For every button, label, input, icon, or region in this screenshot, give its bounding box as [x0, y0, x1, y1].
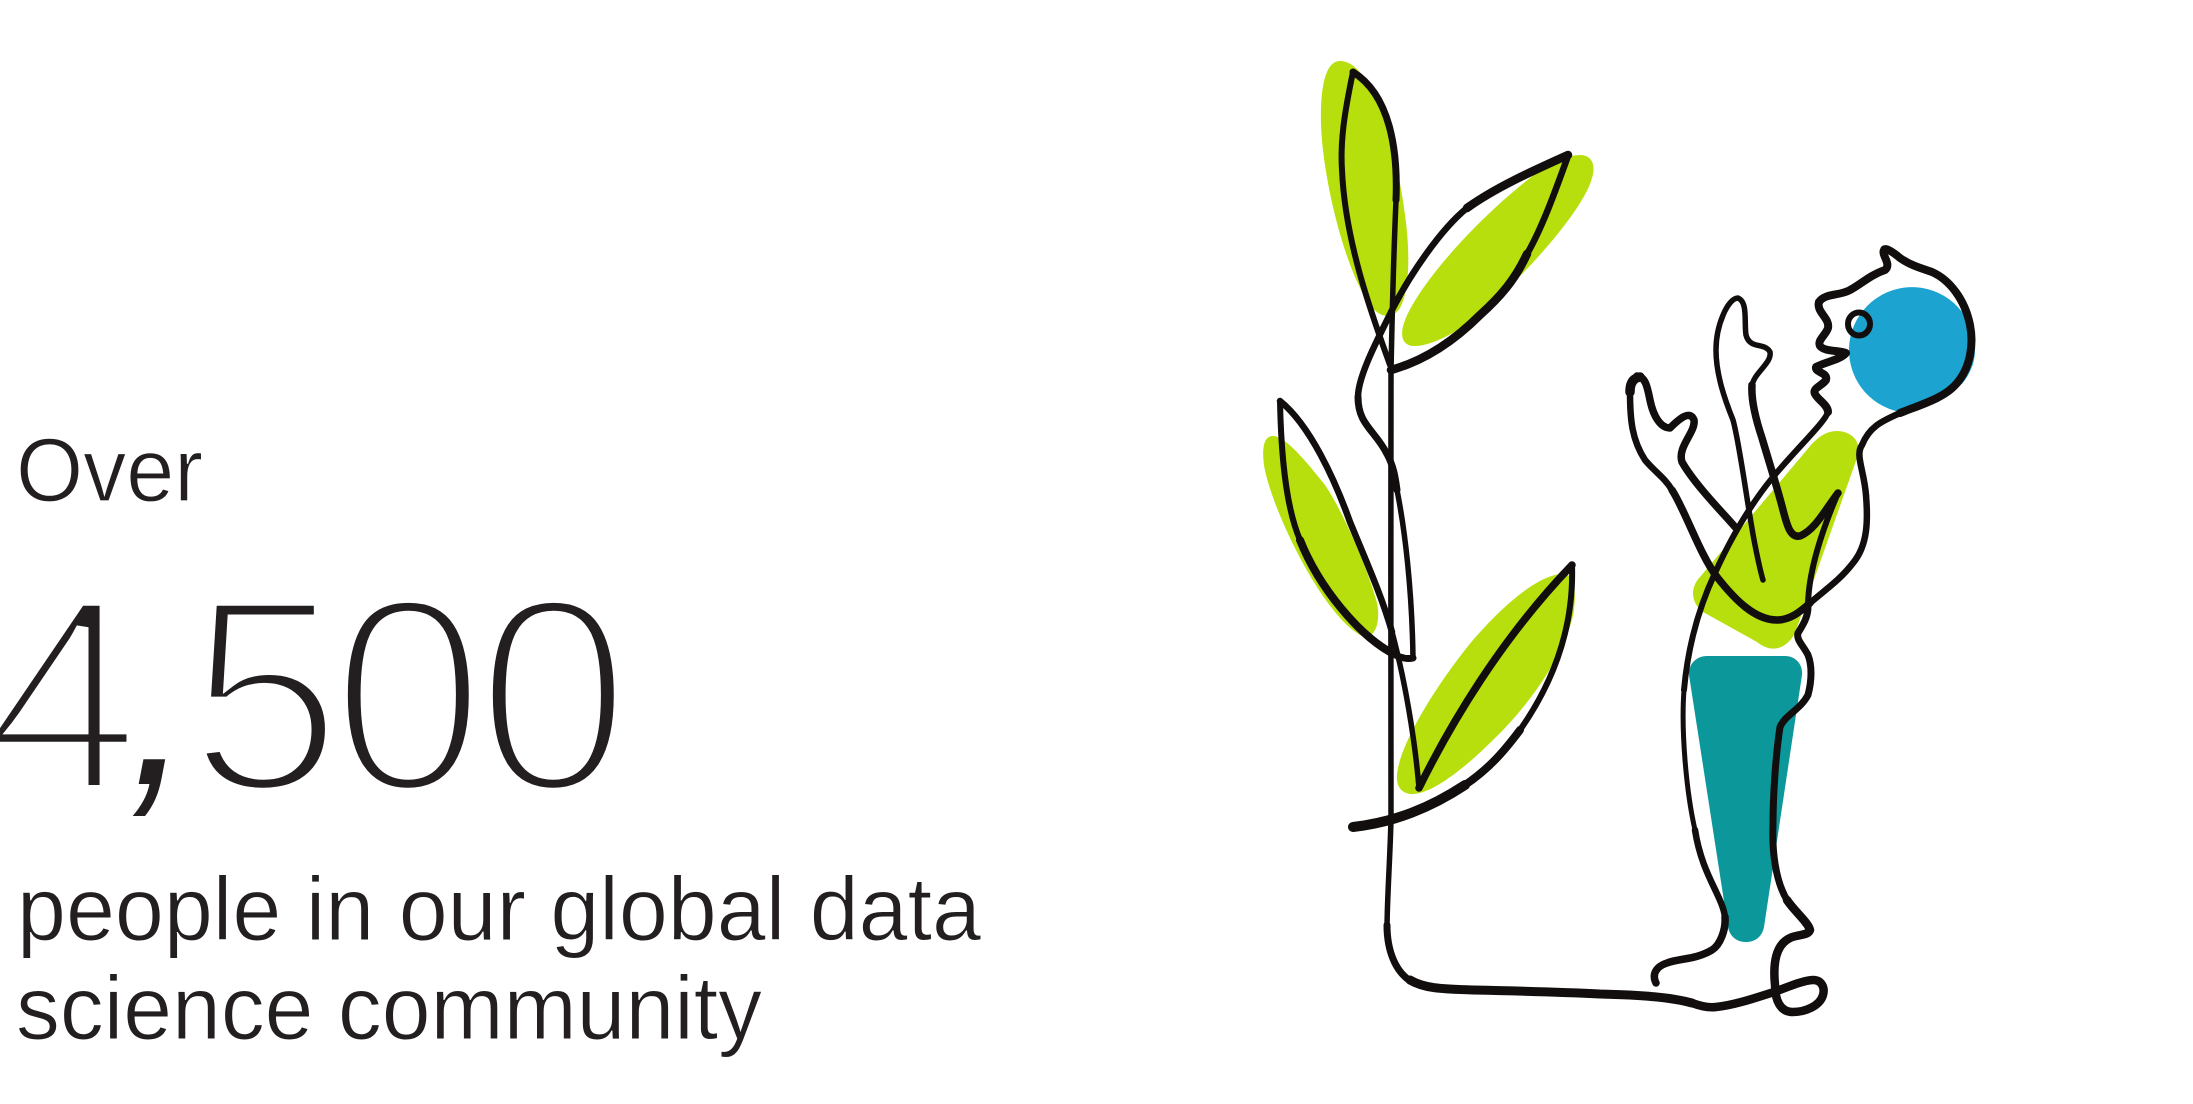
person head: blue circle — [1849, 287, 1975, 412]
big number: 4,500: 0 — [331, 539, 486, 850]
leaf fill: lower right — [1397, 574, 1575, 794]
leaf fill: top left — [1321, 61, 1408, 316]
illustration: plant and person — [1263, 61, 1975, 1012]
text: people in our global data science community: people in our global data — [17, 860, 982, 960]
person eye — [1848, 312, 1870, 336]
person legs: teal shape — [1689, 656, 1802, 942]
person torso: green shape — [1693, 431, 1859, 649]
text: Over: Over — [16, 421, 203, 521]
big number: 4,500: 5 — [188, 539, 343, 850]
leaf fill: top right — [1402, 155, 1594, 346]
person outline: front of leg and raised arm — [1692, 298, 1838, 1012]
big number: 4,500: , — [126, 559, 195, 838]
plant outline — [1280, 72, 1692, 1003]
text: people in our global data science community: science community — [16, 959, 762, 1059]
leaf fill: middle left — [1263, 436, 1378, 636]
text: people in our global data science community — [16, 860, 982, 1059]
person outline: lower arm, back and head — [1630, 249, 1971, 983]
big number: 4,500: 0 — [476, 539, 631, 850]
